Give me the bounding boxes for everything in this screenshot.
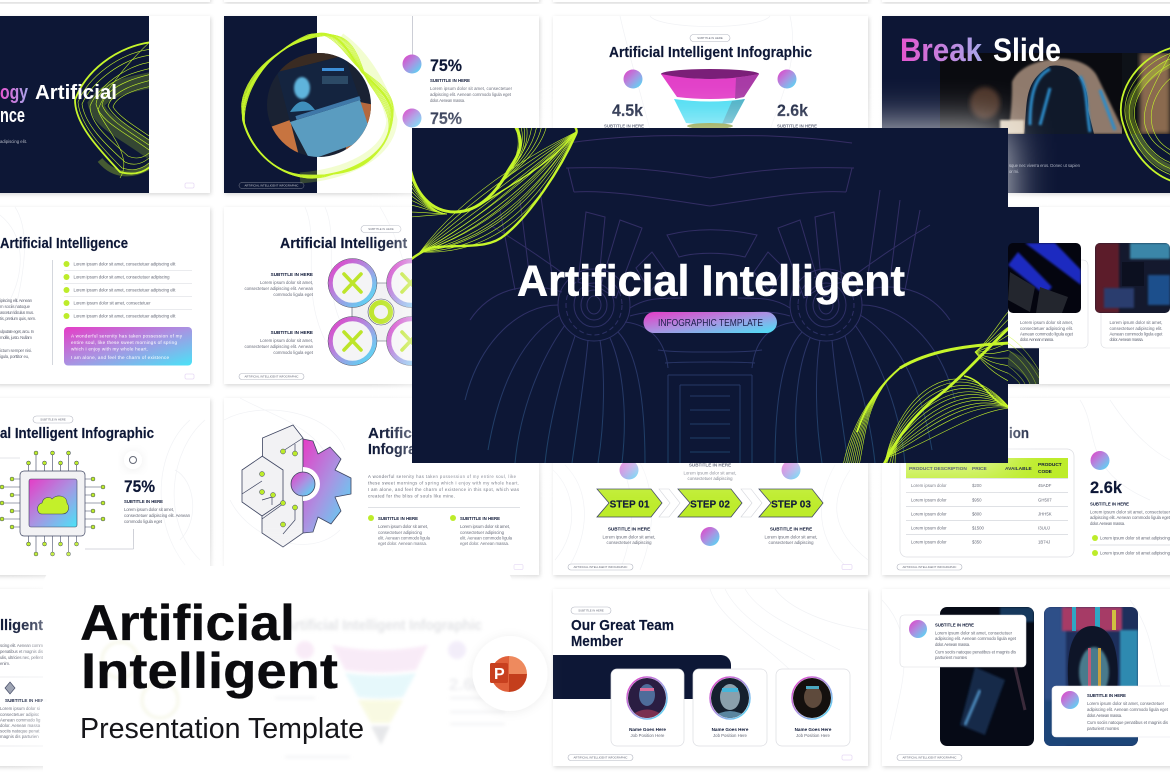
team card three: Name Goes Here bbox=[795, 727, 832, 732]
panel: team slide bbox=[553, 589, 868, 766]
info card: magnis dis parturien bbox=[0, 734, 39, 739]
table: I3UUJ bbox=[1038, 526, 1050, 530]
table: PRICE bbox=[972, 466, 987, 472]
team card one: Job Position Here bbox=[631, 733, 665, 738]
info card: dolor. Aenean massa bbox=[0, 723, 41, 728]
lobe mesh bbox=[886, 379, 1010, 458]
panel: technology title slide: nce bbox=[0, 105, 25, 127]
table: Lorem ipsum dolor bbox=[911, 512, 947, 516]
subtitle: SUBTITLE IN HERE bbox=[124, 499, 163, 504]
footer pill: ARTIFICIAL INTELLIGENT INFOGRAPHIC bbox=[245, 374, 298, 378]
column two: elit. Aenean commodo ligula bbox=[460, 536, 513, 540]
ribbon: slide one bbox=[75, 40, 152, 178]
step arrow two: STEP 02 bbox=[690, 500, 730, 510]
text block top: commodo ligula eget bbox=[273, 292, 314, 297]
footer pill bbox=[239, 182, 304, 188]
left paragraph: ipiscing elit. Aenean bbox=[0, 298, 33, 303]
slide title: ogy bbox=[0, 82, 29, 104]
table: Lorem ipsum dolor bbox=[911, 498, 947, 502]
bright hoop bbox=[900, 343, 1010, 368]
card text two: dolor. Aenean massa. bbox=[1110, 337, 1144, 342]
step arrow three bbox=[759, 489, 823, 517]
description: Lorem ipsum dolor sit amet, consectetuer bbox=[430, 86, 513, 91]
info card: Aenean commodo lig bbox=[0, 718, 41, 722]
gradient quote box: which I enjoy with my whole heart. bbox=[71, 346, 148, 352]
slide caption: adipiscing elit. bbox=[0, 139, 27, 144]
info card one bbox=[900, 615, 1026, 667]
info card two: Lorem ipsum dolor sit amet, consectetuer bbox=[1087, 701, 1165, 706]
info card: Lorem ipsum dolor si bbox=[0, 706, 40, 711]
step arrow one: STEP 01 bbox=[610, 500, 650, 510]
paragraph fragment: penatibus et magnis dis bbox=[0, 649, 43, 654]
card text one: consectetuer adipiscing elit. bbox=[1020, 326, 1073, 331]
info card one: parturient montes bbox=[935, 655, 967, 660]
panel: funnel slide bbox=[553, 16, 868, 193]
column two: eget dolor. Aenean massa. bbox=[460, 541, 509, 546]
panel: image cards slide bbox=[1008, 206, 1170, 388]
top left ribbon bbox=[410, 122, 577, 260]
photo: hardware bbox=[940, 607, 1034, 746]
table: $1500 bbox=[972, 526, 985, 530]
text block: step one: consectetuer adipiscing bbox=[607, 540, 652, 545]
table: Lorem ipsum dolor bbox=[911, 526, 947, 530]
text block: step two bbox=[683, 462, 737, 481]
card heading bbox=[80, 595, 338, 699]
column two: consectetuer adipiscing bbox=[460, 530, 505, 535]
break slide caption bbox=[1009, 163, 1081, 174]
description: dolor. Aenean massa. bbox=[430, 98, 465, 103]
step arrow two bbox=[678, 489, 742, 517]
footer pill: ARTIFICIAL INTELLIGENT INFOGRAPHIC bbox=[574, 756, 627, 760]
checklist: Lorem ipsum dolor sit amet, consectetuer adipiscing elit bbox=[74, 262, 176, 266]
table: CODE bbox=[1038, 469, 1053, 475]
team card two: Name Goes Here bbox=[712, 727, 749, 732]
break slide caption: or mi. bbox=[1009, 169, 1019, 174]
stat: 75 percent: 75% bbox=[430, 56, 462, 75]
panel: break slide bbox=[882, 16, 1170, 193]
subtitle pill bbox=[644, 312, 777, 333]
left paragraph: ictum semper nisi. bbox=[0, 348, 32, 353]
bright band edges bbox=[410, 122, 577, 260]
bottom right ribbon bbox=[843, 310, 1012, 466]
card heading: Intelligent bbox=[81, 643, 338, 699]
page chip bbox=[185, 183, 194, 188]
mirrored face line art bbox=[710, 136, 955, 463]
text block top: consectetuer adipiscing elit. Aenean bbox=[244, 286, 314, 291]
white glow around product card bbox=[43, 566, 513, 780]
paragraph: A wonderful serenity has taken possession of my entire soul, like bbox=[368, 474, 517, 479]
info card: sociis natoque penat bbox=[0, 728, 40, 734]
table: JHH5K bbox=[1038, 512, 1052, 516]
panel: steps slide bbox=[553, 398, 868, 575]
icon: powerpoint badge bbox=[472, 636, 548, 711]
panel: percent slide with photo bbox=[224, 16, 539, 193]
column one: elit. Aenean commodo ligula bbox=[378, 536, 431, 540]
hoop mesh foot bbox=[843, 368, 900, 466]
subtitle pill: SUBTITLE IN HERE bbox=[697, 36, 723, 40]
olive ribbon tail bbox=[1008, 336, 1040, 384]
description: adipiscing elit. Aenean commodo ligula eget bbox=[430, 92, 512, 97]
dark band bbox=[553, 655, 731, 699]
description: consectetuer adipiscing elit. Aenean bbox=[124, 513, 191, 518]
panel: brain gear slide bbox=[224, 398, 539, 575]
panel: drone infographic slide bbox=[224, 207, 539, 384]
checklist: Lorem ipsum dolor sit amet, consectetuer bbox=[74, 300, 151, 306]
stat: second 75 percent: 75% bbox=[430, 109, 462, 128]
connector line bbox=[412, 16, 414, 55]
footer pill: ARTIFICIAL INTELLIGENT INFOGRAPHIC bbox=[903, 756, 956, 760]
photo: laptop circle bbox=[267, 53, 371, 157]
icon: cloud bbox=[38, 496, 69, 514]
subtitle: SUBTITLE IN HERE bbox=[1090, 502, 1129, 506]
connector bbox=[85, 529, 134, 549]
description: Lorem ipsum dolor sit amet, consectetuer bbox=[1090, 510, 1170, 514]
left paragraph: m sociis natoque bbox=[0, 304, 31, 309]
footer pill bbox=[897, 754, 962, 760]
heading: Our Great Team bbox=[571, 618, 674, 634]
panel: photo cards slide bbox=[882, 589, 1170, 766]
card heading: Artificial bbox=[80, 595, 295, 651]
text block: step two: consectetuer adipiscing bbox=[688, 476, 733, 481]
table: $950 bbox=[972, 498, 982, 502]
heading: Artificial Intelligence bbox=[0, 236, 128, 252]
description bbox=[124, 507, 191, 524]
info card one: SUBTITLE IN HERE bbox=[935, 622, 974, 628]
ghost funnel slide bbox=[102, 618, 505, 757]
team card one: Name Goes Here bbox=[629, 727, 666, 732]
brain gear diagram bbox=[242, 425, 351, 547]
heading: Infogra bbox=[368, 442, 417, 458]
right fan mesh bbox=[975, 310, 1010, 382]
dark strip right of main bbox=[1008, 207, 1039, 384]
face line art background bbox=[410, 122, 1012, 466]
table: GH507 bbox=[1038, 498, 1052, 502]
subtitle pill bbox=[33, 416, 73, 423]
team card two bbox=[693, 669, 767, 746]
subtitle pill: SUBTITLE IN HERE bbox=[40, 418, 66, 422]
checklist: Lorem ipsum dolor sit amet, consectetuer adipiscing elit bbox=[74, 314, 176, 318]
info card bbox=[0, 677, 54, 746]
subtitle pill: SUBTITLE IN HERE bbox=[368, 227, 394, 231]
center trapezoid bbox=[667, 230, 757, 257]
table: 45ADF bbox=[1038, 483, 1052, 488]
footer pill bbox=[568, 754, 633, 760]
table: 1B74J bbox=[1038, 540, 1050, 544]
text block top bbox=[244, 272, 314, 297]
bright diagonal bbox=[883, 325, 1012, 466]
footer pill bbox=[568, 564, 633, 570]
card one bbox=[1000, 260, 1088, 348]
bright hoop bbox=[410, 124, 520, 212]
table: PRODUCT DESCRIPTION bbox=[909, 466, 967, 472]
gradient quote box: I am alone, and feel the charm of existence bbox=[71, 355, 169, 360]
info card two: parturient montes bbox=[1087, 726, 1119, 731]
table: $200 bbox=[972, 483, 982, 488]
drone diagram bbox=[328, 258, 436, 366]
left paragraph: ulputate eget, arcu. In bbox=[0, 329, 35, 334]
text block bottom: SUBTITLE IN HERE bbox=[271, 330, 313, 335]
paragraph fragment: ulis, ultricies nec, pellent bbox=[0, 655, 44, 660]
column one: SUBTITLE IN HERE bbox=[378, 516, 418, 521]
gradient quote box: entire soul, like these sweet mornings of spring bbox=[71, 340, 177, 345]
stat: 75 percent: 75% bbox=[124, 477, 155, 496]
team card two: Job Position Here bbox=[713, 733, 748, 738]
stat: 4.5k: 4.5k bbox=[612, 101, 644, 120]
footer pill: ARTIFICIAL INTELLIGENT INFOGRAPHIC bbox=[903, 565, 956, 569]
page chip bbox=[185, 374, 194, 379]
checks: Lorem ipsum dolor sit amet adipiscing bbox=[1100, 550, 1170, 556]
checklist bbox=[64, 261, 192, 319]
heading: Member bbox=[571, 634, 623, 650]
info card two bbox=[1052, 686, 1170, 737]
icon: right bbox=[778, 70, 796, 88]
table: $350 bbox=[972, 540, 982, 544]
icon: left bbox=[624, 70, 642, 88]
funnel chart bbox=[661, 69, 759, 129]
checks: Lorem ipsum dolor sit amet adipiscing bbox=[1100, 536, 1170, 540]
panel: break slide: Slide bbox=[993, 32, 1061, 68]
photo: robot bbox=[940, 53, 1170, 134]
column one bbox=[368, 515, 431, 546]
info card two: dolor. Aenean massa. bbox=[1087, 713, 1122, 718]
card text two: Lorem ipsum dolor sit amet, bbox=[1110, 320, 1162, 325]
page chip bbox=[514, 564, 523, 570]
panel: technology title slide bbox=[0, 16, 210, 193]
panel: chip infographic slide bbox=[0, 398, 210, 575]
card text one: dolor. Aenean massa. bbox=[1020, 337, 1054, 342]
description: Lorem ipsum dolor sit amet, bbox=[124, 507, 174, 512]
subtitle: SUBTITLE IN HERE bbox=[430, 78, 470, 83]
table: $800 bbox=[972, 512, 982, 516]
stat: 2.6k: 2.6k bbox=[777, 101, 809, 120]
column two: Lorem ipsum dolor sit amet, bbox=[460, 524, 510, 529]
footer pill: ARTIFICIAL INTELLIGENT INFOGRAPHIC bbox=[245, 184, 298, 188]
icon: percent one bbox=[402, 54, 422, 74]
footer pill bbox=[239, 374, 304, 380]
panel: main cover slide bbox=[410, 122, 1012, 466]
paragraph fragment bbox=[0, 643, 44, 666]
ghost funnel slide: Artificial Intelligent Infographic bbox=[285, 618, 482, 634]
ghost funnel slide: 2.6k bbox=[449, 675, 483, 694]
column two: SUBTITLE IN HERE bbox=[460, 516, 500, 521]
description: adipiscing elit. Aenean commodo ligula eget bbox=[1090, 515, 1170, 520]
card text two: consectetuer adipiscing elit. bbox=[1110, 326, 1162, 331]
text block: step three: consectetuer adipiscing bbox=[769, 540, 814, 545]
top row slide edges bbox=[0, 0, 1170, 2]
break slide caption: sque nec viverra eros. Donec ut sapien bbox=[1009, 163, 1081, 168]
info card one: Cum sociis natoque penatibus et magnis dis bbox=[935, 650, 1016, 654]
paragraph: created for the bliss of souls like mine. bbox=[368, 494, 455, 498]
info card one: adipiscing elit. Aenean commodo ligula eget bbox=[935, 636, 1017, 641]
white glow around main slide bbox=[412, 128, 1008, 463]
text block: step one: SUBTITLE IN HERE bbox=[608, 526, 650, 532]
paragraph: I am alone, and feel the charm of existence in this spot, which was bbox=[368, 487, 519, 492]
column one: consectetuer adipiscing bbox=[378, 530, 423, 535]
subtitle pill bbox=[571, 607, 611, 614]
info card two: adipiscing elit. Aenean commodo ligula eget bbox=[1087, 707, 1169, 712]
icon: head bbox=[124, 451, 142, 469]
card text one bbox=[1020, 320, 1074, 342]
table: Lorem ipsum dolor bbox=[911, 483, 947, 488]
text block top: SUBTITLE IN HERE bbox=[271, 272, 313, 277]
text block bottom bbox=[244, 330, 314, 355]
photo: keyboard bbox=[1008, 243, 1081, 313]
main title: Artificial Intelligent bbox=[517, 256, 905, 306]
subtitle pill: SUBTITLE IN HERE bbox=[578, 608, 604, 612]
text block bottom: consectetuer adipiscing elit. Aenean bbox=[244, 344, 314, 349]
heading: break slide: Break bbox=[900, 32, 982, 68]
table: Lorem ipsum dolor bbox=[911, 540, 947, 544]
icon: step one bbox=[620, 460, 638, 480]
paragraph fragment: scing elit. Aenean comm bbox=[0, 643, 43, 648]
text block bottom: Lorem ipsum dolor sit amet, bbox=[260, 338, 313, 343]
photo: circuit bbox=[1095, 243, 1170, 313]
table: AVAILABLE bbox=[1005, 466, 1033, 472]
info card: consectetuer adipisc bbox=[0, 712, 40, 717]
card two bbox=[1101, 260, 1170, 348]
panel: technology title slide: Artificial bbox=[35, 82, 117, 104]
card subheading: Presentation Template bbox=[80, 713, 364, 745]
text block: step three bbox=[764, 526, 818, 545]
foot mesh bbox=[884, 443, 897, 463]
icon: stat bbox=[1090, 451, 1110, 470]
panel: checklist slide bbox=[0, 207, 210, 384]
column two bbox=[450, 515, 513, 546]
icon: percent two bbox=[402, 108, 422, 128]
text block: step two: Lorem ipsum dolor sit amet, bbox=[683, 470, 737, 476]
paragraph fragment: enim. bbox=[0, 661, 10, 666]
footer pill: ARTIFICIAL INTELLIGENT INFOGRAPHIC bbox=[574, 565, 627, 569]
subtitle left: SUBTITLE IN HERE bbox=[604, 124, 644, 128]
step arrow three: STEP 03 bbox=[771, 500, 811, 510]
left paragraph: tis, pretium quis, sem. bbox=[0, 316, 36, 321]
gradient quote box: A wonderful serenity has taken possession of my bbox=[71, 334, 183, 338]
heading: al Intelligent Infographic bbox=[0, 426, 154, 442]
info card one: dolor. Aenean massa. bbox=[935, 642, 970, 647]
heading bbox=[571, 618, 674, 650]
heading: Artificial Intelligent Infographic bbox=[609, 45, 812, 61]
description: commodo ligula eget bbox=[124, 519, 163, 524]
info card two: Cum sociis natoque penatibus et magnis dis bbox=[1087, 720, 1168, 725]
icon: middle bbox=[700, 527, 720, 546]
checklist: Lorem ipsum dolor sit amet, consectetuer adipiscing bbox=[74, 274, 170, 280]
left paragraph bbox=[0, 298, 36, 359]
diagonal mesh band bbox=[420, 132, 576, 252]
team card three bbox=[776, 669, 850, 746]
ribbon: around photo bbox=[229, 19, 406, 191]
team card one bbox=[611, 669, 684, 746]
text block: step one bbox=[602, 526, 656, 545]
gradient quote box bbox=[64, 327, 192, 366]
info card: SUBTITLE IN HERE bbox=[5, 698, 47, 703]
panel: product card bbox=[43, 566, 513, 780]
footer pill bbox=[897, 564, 962, 570]
icon: step three bbox=[782, 460, 800, 480]
subtitle pill bbox=[690, 34, 730, 42]
team card three: Job Position Here bbox=[796, 733, 831, 738]
description bbox=[1090, 510, 1170, 526]
subtitle pill: INFOGRAPHIC TEMPLATE bbox=[658, 317, 763, 329]
checks bbox=[1090, 535, 1170, 556]
text block: step three: SUBTITLE IN HERE bbox=[770, 526, 812, 532]
left paragraph: mollis, justo. Nullam bbox=[0, 335, 32, 340]
panel: table slide bbox=[882, 398, 1170, 575]
chip diagram bbox=[0, 451, 105, 556]
stat: 2.6k: 2.6k bbox=[1090, 478, 1123, 497]
subtitle right: SUBTITLE IN HERE bbox=[777, 124, 817, 128]
column one: Lorem ipsum dolor sit amet, bbox=[378, 524, 428, 529]
paragraph: these sweet mornings of spring which I enjoy with my whole heart. bbox=[368, 480, 519, 486]
page chip bbox=[842, 755, 852, 760]
step arrow one bbox=[597, 489, 662, 517]
info card one: Lorem ipsum dolor sit amet, consectetuer bbox=[935, 630, 1013, 636]
panel: lower left slide bbox=[0, 589, 210, 766]
card text one: Lorem ipsum dolor sit amet, bbox=[1020, 320, 1073, 325]
left paragraph: ascetur ridiculus mus. bbox=[0, 310, 34, 315]
subtitle pill bbox=[361, 226, 401, 232]
description: dolor. Aenean massa. bbox=[1090, 521, 1125, 526]
card text two bbox=[1110, 320, 1163, 342]
column one: eget dolor. Aenean massa. bbox=[378, 541, 427, 546]
table bbox=[900, 449, 1074, 557]
neighbours above glow bbox=[1000, 207, 1088, 384]
text block top: Lorem ipsum dolor sit amet, bbox=[260, 280, 313, 285]
page chip bbox=[842, 564, 852, 570]
heading bbox=[368, 426, 417, 458]
upper band mesh bbox=[497, 124, 547, 186]
checklist: Lorem ipsum dolor sit amet, consectetuer adipiscing elit bbox=[74, 288, 176, 292]
heading: Artificial Intelligent I bbox=[280, 236, 415, 252]
text block: step one: Lorem ipsum dolor sit amet, bbox=[602, 534, 656, 540]
text block bottom: commodo ligula eget bbox=[273, 350, 314, 355]
description bbox=[430, 86, 513, 103]
paragraph bbox=[368, 474, 519, 498]
left lobe mesh bbox=[412, 180, 447, 218]
table: PRODUCT bbox=[1038, 462, 1062, 468]
ribbon: break slide bbox=[1121, 45, 1170, 182]
text block: step three: Lorem ipsum dolor sit amet, bbox=[764, 534, 818, 540]
info card two: SUBTITLE IN HERE bbox=[1087, 693, 1126, 698]
heading fragment: ion bbox=[1009, 426, 1029, 442]
text block: step two: SUBTITLE IN HERE bbox=[689, 462, 731, 468]
card text two: Aenean commodo ligula eget bbox=[1110, 332, 1163, 336]
heading: Artifici bbox=[368, 426, 416, 442]
heading fragment: lligent bbox=[0, 618, 43, 634]
card text one: Aenean commodo ligula eget bbox=[1020, 332, 1074, 336]
white chevrons bbox=[659, 489, 762, 517]
left paragraph: igula, porttitor eu, bbox=[0, 354, 29, 359]
icon: powerpoint badge: P bbox=[494, 666, 505, 683]
photo: masked face bbox=[1044, 607, 1138, 746]
